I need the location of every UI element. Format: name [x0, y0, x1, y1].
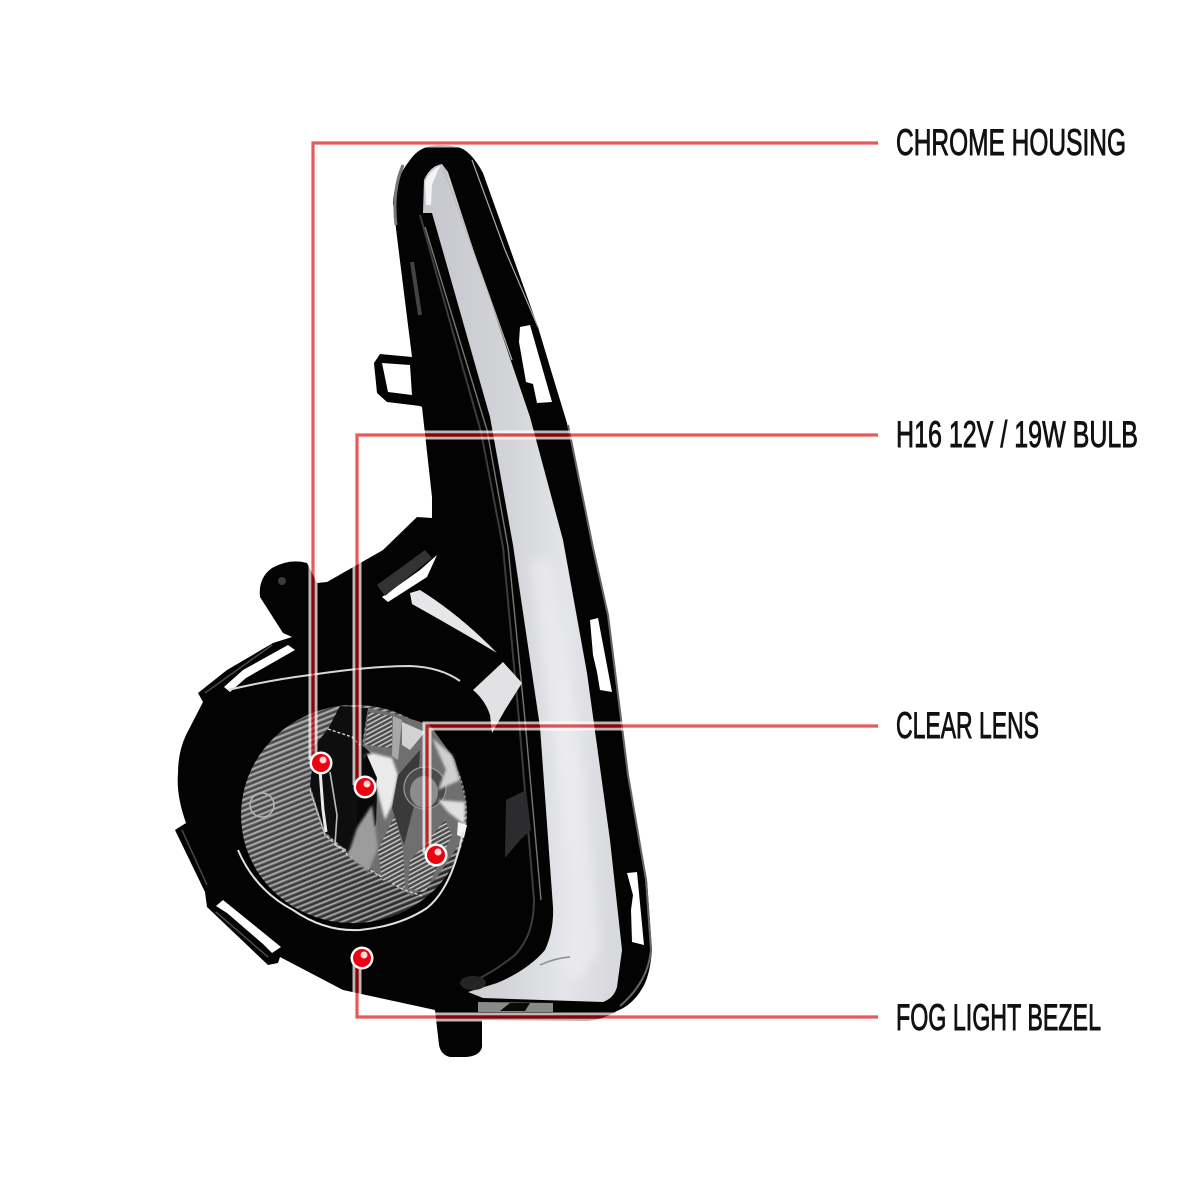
leader line [357, 960, 878, 1017]
mounting tab hole [382, 363, 412, 395]
marker dot [354, 776, 376, 798]
black housing body [175, 145, 652, 1057]
callout: clear lens [424, 705, 1039, 866]
upper gray reflector streaks [392, 716, 402, 760]
chrome housing strip [423, 164, 622, 1002]
chrome tip highlight [425, 166, 440, 205]
gray wedge [348, 805, 378, 872]
lower ribbed panels [378, 815, 405, 888]
callout: chrome housing [310, 122, 1126, 774]
reflector right side [348, 708, 465, 896]
callout lines halo [308, 145, 624, 1022]
label: CLEAR LENS [896, 705, 1039, 746]
mounting slot cutouts [216, 325, 644, 953]
fog light annotated diagram [175, 128, 1137, 1057]
reflector bright streaks [320, 770, 326, 832]
black wedge [357, 753, 377, 825]
bright center reflection [365, 753, 398, 820]
crescent inner edge [310, 790, 422, 896]
leader line [427, 726, 878, 853]
leader line [357, 435, 878, 785]
bulb [404, 767, 446, 809]
leader line [313, 143, 878, 760]
ribbed top panel [365, 712, 392, 748]
E-mark [250, 793, 274, 817]
fog light assembly [175, 145, 652, 1057]
callout: fog light bezel [350, 946, 1101, 1038]
right reflections [432, 738, 460, 790]
lens ribbing [227, 690, 481, 938]
marker dot [310, 752, 332, 774]
lens rim highlight [238, 832, 463, 930]
callout: bulb [354, 414, 1138, 798]
reflector dark center [310, 706, 378, 852]
lens glass [227, 690, 481, 938]
chrome reflection streak [534, 564, 596, 968]
gloss highlights on bezel [410, 590, 497, 653]
marker dot [350, 946, 374, 970]
lens [227, 690, 481, 938]
edge lines along housing [395, 160, 651, 1006]
marker dot [424, 844, 448, 866]
